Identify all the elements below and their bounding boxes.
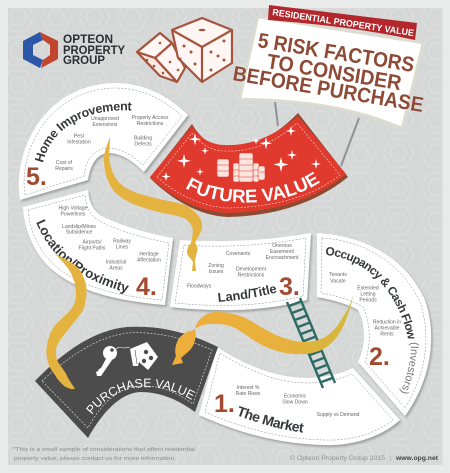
icon: key and house — [96, 342, 158, 376]
number 3: 3. — [279, 273, 300, 301]
risk labels: Vacate — [330, 278, 346, 284]
risk labels — [55, 115, 169, 172]
heading: the market: The Market — [238, 406, 304, 433]
risk labels: Tenants — [329, 272, 347, 278]
risk labels: Easement/ — [270, 249, 295, 255]
number 1: 1. — [214, 390, 235, 418]
risk labels: Onerous — [272, 243, 292, 249]
risk labels: Building — [134, 136, 152, 142]
logo wordmark: GROUP — [63, 53, 105, 67]
logo wordmark — [63, 32, 125, 67]
title text: TO CONSIDER — [265, 50, 403, 95]
footnote — [13, 447, 195, 462]
copyright and website — [290, 454, 439, 462]
risk labels: Heritage — [139, 252, 159, 258]
risk labels: Encroachment — [266, 255, 299, 261]
icon: stars — [162, 126, 321, 181]
risk labels: Development — [236, 266, 267, 272]
risk labels: Flight Paths — [79, 246, 106, 252]
title text — [231, 29, 425, 117]
icon: dice — [137, 18, 232, 82]
logo wordmark: PROPERTY — [63, 43, 125, 57]
panel: occupancy and cash flow — [317, 233, 434, 418]
snake: location to purchase value — [46, 254, 87, 389]
panel: the market — [199, 348, 402, 448]
risk labels: Unapproved — [91, 116, 119, 122]
copyright and website: | — [390, 455, 392, 462]
risk labels — [187, 243, 299, 290]
risk labels: Floodways — [187, 284, 212, 290]
risk labels — [329, 272, 401, 338]
risk labels: Extensions — [93, 122, 118, 128]
risk labels: Letting — [360, 292, 376, 298]
risk labels: Rate Rises — [236, 391, 261, 397]
risk labels: Achievable — [375, 326, 400, 332]
icon: hexagon logo mark — [23, 32, 58, 68]
heading: purchase value: PURCHASE VALUE — [86, 378, 196, 414]
snake: home improvement to land — [104, 137, 202, 271]
risk labels: Lines — [116, 244, 129, 250]
risk labels: Railway — [113, 238, 131, 244]
ladder — [287, 298, 335, 388]
risk labels: Areas — [109, 266, 123, 272]
heading: future value: FUTURE VALUE — [186, 172, 320, 203]
risk labels: Slow Down — [282, 400, 308, 406]
risk labels: Repairs — [55, 166, 73, 172]
risk labels: Interest % — [237, 385, 260, 391]
footnote: *This is a small sample of considerations that affect residential — [13, 447, 195, 453]
title text: 5 RISK FACTORS — [256, 29, 416, 77]
risk labels: Reduction in — [373, 320, 401, 326]
signboard: 5 risk factors — [231, 5, 425, 166]
banner: residential property value: RESIDENTIAL PROPERTY VALUE — [272, 7, 415, 38]
panel: home improvement — [18, 83, 190, 202]
risk labels: Covenants — [226, 251, 251, 257]
panel: purchase value — [35, 326, 218, 438]
risk labels: Supply vs Demand — [317, 412, 360, 418]
risk labels — [236, 385, 360, 418]
risk labels: Zoning — [208, 263, 224, 269]
risk labels: Subsidence — [66, 230, 92, 236]
risk labels: Periods — [359, 298, 377, 304]
footnote: property value, please contact us for more information. — [14, 456, 177, 462]
risk labels: Infestation — [67, 140, 91, 146]
icon: coin stacks — [217, 153, 265, 182]
risk labels: Property Access — [132, 115, 169, 121]
risk labels: Issues — [209, 269, 224, 275]
snake: occupancy to purchase value — [172, 295, 353, 365]
title text: BEFORE PURCHASE — [231, 62, 425, 117]
heading: location / proximity: Location/Proximity — [36, 219, 129, 294]
logo wordmark: OPTEON — [63, 32, 113, 46]
risk labels: Industrial — [106, 260, 126, 266]
risk labels: Restrictions — [238, 272, 265, 278]
heading: home improvement: Home Improvement — [34, 102, 132, 162]
number 5: 5. — [26, 163, 47, 191]
heading: land / title: Land/Title — [218, 285, 276, 302]
risk labels: Restrictions — [137, 121, 164, 127]
risk labels: Defects — [134, 142, 152, 148]
risk labels: Extended — [357, 286, 379, 292]
panel: land / title — [170, 233, 314, 314]
risk labels: Cost of — [56, 160, 73, 166]
risk labels: Rents — [380, 332, 394, 338]
risk labels: Economic — [284, 394, 307, 400]
risk labels: High Voltage — [59, 206, 88, 212]
sign posts — [275, 102, 359, 166]
copyright and website: © Opteon Property Group 2015 — [290, 454, 386, 462]
sign panel — [240, 17, 423, 128]
logo: Opteon Property Group — [23, 32, 125, 68]
risk labels: Pest — [74, 134, 85, 140]
panel: location / proximity — [23, 190, 176, 308]
number 4: 4. — [136, 273, 157, 301]
copyright and website: www.opg.net — [395, 455, 439, 462]
heading: investors: (Investors) — [399, 342, 419, 394]
risk labels: Affectation — [137, 258, 161, 264]
heading: occupancy and cash flow: Occupancy & Cash Flow — [326, 247, 414, 338]
risk labels — [59, 206, 161, 272]
risk labels: Powerlines — [61, 212, 86, 218]
panel: future value — [150, 113, 348, 217]
number 2: 2. — [369, 343, 390, 371]
risk labels: Airports/ — [83, 240, 102, 246]
risk labels: Landslip/Mines — [62, 224, 96, 230]
